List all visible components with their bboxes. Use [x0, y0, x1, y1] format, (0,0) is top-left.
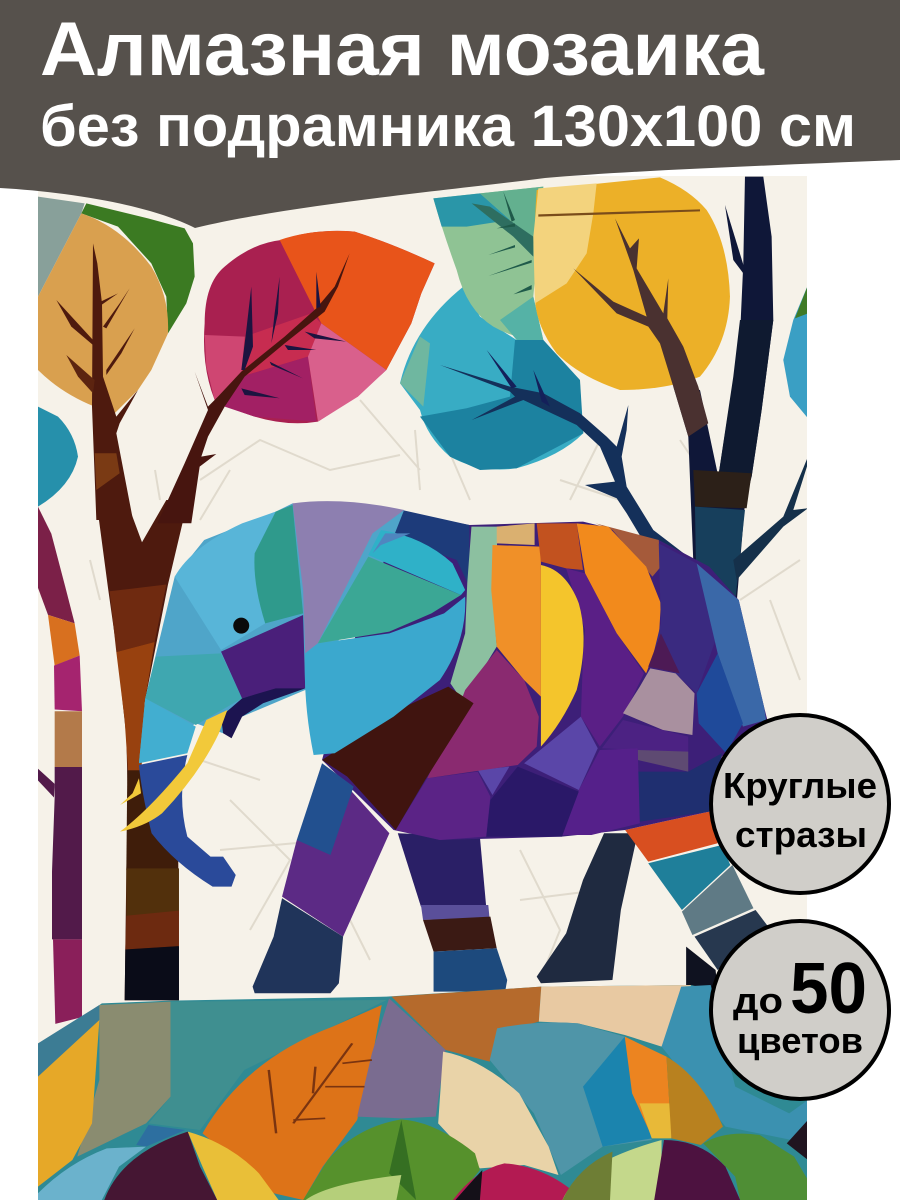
crimson leaf body: [204, 231, 435, 423]
upper right leaves and trees: [400, 177, 808, 603]
upper left leaves and crimson leaf: [38, 197, 435, 523]
badge: round rhinestones: [711, 715, 889, 893]
crimson leaf branch: [157, 253, 350, 523]
head: [139, 501, 404, 887]
brown branch in yellow leaf: [573, 218, 708, 437]
front inner leg: [398, 833, 507, 992]
badge: up to 50 colours: цветов: [737, 1020, 863, 1061]
badge: up to 50 colours: 50: [790, 949, 867, 1029]
ear: [305, 530, 465, 755]
header banner: [0, 0, 900, 228]
subtitle: без подрамника 130х100 см: [40, 94, 856, 159]
front outer leg: [253, 763, 389, 993]
body silhouette: [322, 510, 768, 840]
navy right tree: [673, 177, 808, 603]
eye: [233, 618, 249, 634]
teal leaf: [400, 287, 583, 470]
body patches: [322, 510, 766, 840]
tusks: [120, 710, 227, 832]
rear inner leg: [537, 833, 638, 983]
yellow leaf: [533, 177, 730, 390]
rear outer leg: [625, 812, 768, 970]
brown tree trunk: [96, 500, 188, 1000]
left magenta tree: [38, 507, 82, 1024]
badge: up to 50 colours: [711, 921, 889, 1099]
orange leaf: [38, 213, 168, 413]
gray teal fragment: [38, 197, 85, 297]
bottom patchwork leaves: [38, 985, 808, 1200]
panel: mosaic picture: [38, 176, 808, 1200]
green leaf: [81, 203, 195, 333]
green leaf: [433, 187, 543, 340]
navy branch in teal leaf: [440, 350, 684, 554]
right edge leaf: [783, 285, 808, 418]
badge: round rhinestones: Круглые: [723, 765, 877, 806]
left tree upper trunk: [56, 243, 138, 520]
elephant: [120, 501, 768, 993]
left edge teal leaf: [38, 407, 78, 507]
tree base behind rear leg: [686, 947, 718, 990]
badge: round rhinestones: стразы: [735, 814, 867, 855]
badge: up to 50 colours: до: [733, 980, 783, 1021]
title: Алмазная мозаика: [40, 7, 765, 92]
